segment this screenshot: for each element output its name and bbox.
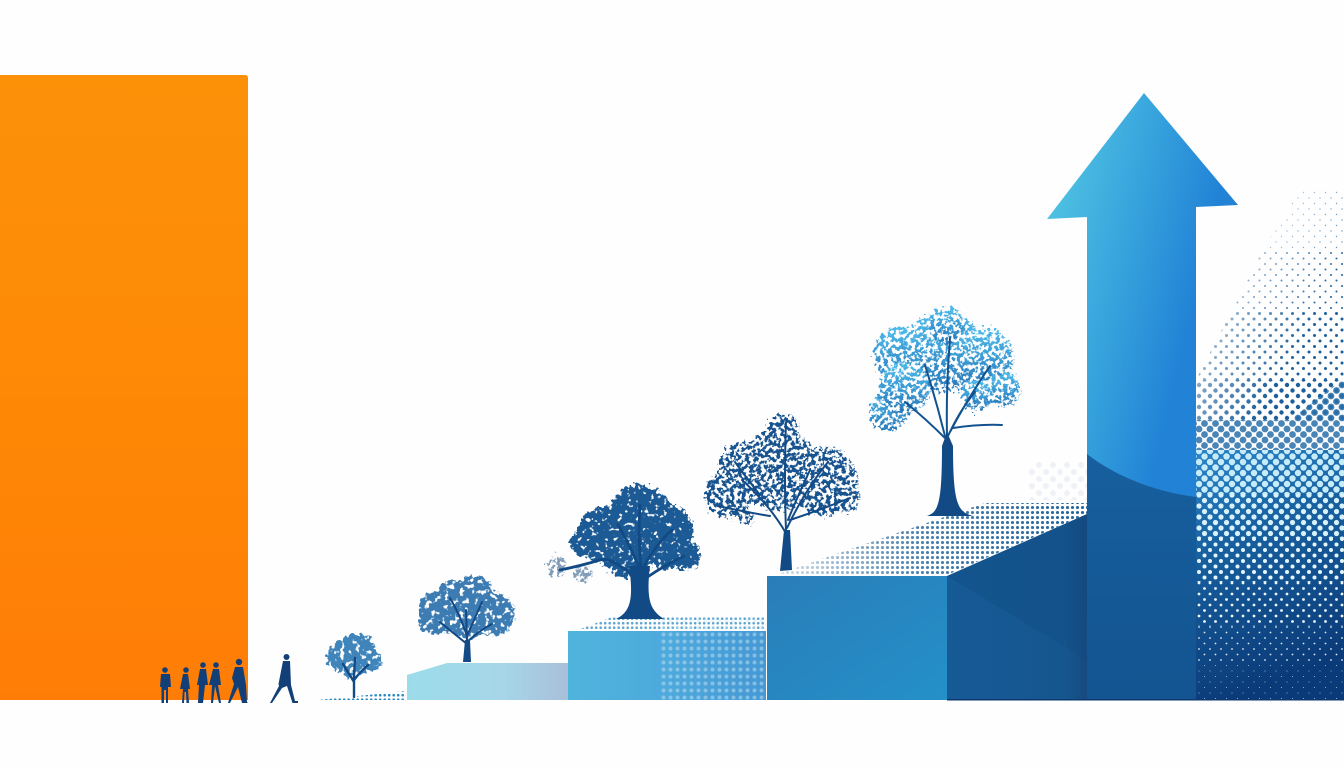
- step 3 halftone overlay: [660, 617, 766, 700]
- person 5: [228, 659, 248, 703]
- tree 1: [327, 634, 382, 697]
- tree 2 trunk: [463, 640, 471, 662]
- step 3 front face: [568, 631, 766, 700]
- orange panel: [0, 75, 248, 700]
- arrow light upper part: [1047, 93, 1238, 505]
- large growth arrow: [1047, 93, 1238, 700]
- step 4 side shadow plane: [947, 514, 1087, 660]
- base shadow line: [947, 699, 1344, 700]
- tree 1 trunk: [343, 658, 368, 697]
- person 2: [180, 667, 190, 703]
- tree 2 canopy: [418, 576, 515, 638]
- diamond transition band: [1196, 378, 1344, 450]
- right halftone field: [1196, 190, 1344, 700]
- tree 5 trunk: [927, 432, 973, 516]
- step 4 top halftone: [775, 503, 1087, 575]
- step 2 block: [407, 663, 568, 700]
- dark base gradient: [1196, 450, 1344, 700]
- tree 5 canopy: [871, 307, 1022, 431]
- person 4: [209, 662, 221, 703]
- tree 3: [548, 485, 700, 619]
- step 3 top halftone: [575, 617, 766, 631]
- tree 3 left wispy branch leaves: [548, 556, 593, 583]
- tree 4 branches: [718, 422, 850, 535]
- tree 3 canopy: [571, 485, 700, 578]
- person 6 walking: [270, 654, 298, 703]
- upper blue dots fading out: [1196, 190, 1344, 420]
- tree 2 branches: [440, 598, 492, 644]
- step 1 halftone ground: [318, 691, 406, 700]
- faint halftone halo: [1028, 462, 1087, 500]
- arrow dark lower part: [1087, 454, 1196, 700]
- white dot bands: [1196, 450, 1344, 494]
- step 4 block: [767, 503, 1087, 700]
- tree 2: [418, 576, 515, 662]
- step 4 front face: [767, 576, 947, 700]
- step 4 side face: [947, 514, 1087, 700]
- tree 4: [706, 413, 861, 571]
- tree 4 canopy: [706, 413, 861, 525]
- tree 5: [871, 307, 1022, 516]
- tree 1 canopy: [327, 634, 382, 677]
- tree 4 trunk: [780, 530, 792, 571]
- tree 3 trunk: [616, 566, 664, 619]
- people group: [160, 654, 298, 703]
- person 1: [160, 667, 171, 703]
- tree 3 branches: [560, 505, 684, 578]
- step 3 block: [568, 617, 766, 700]
- tree 5 branches: [905, 338, 1002, 440]
- person 3: [197, 662, 208, 703]
